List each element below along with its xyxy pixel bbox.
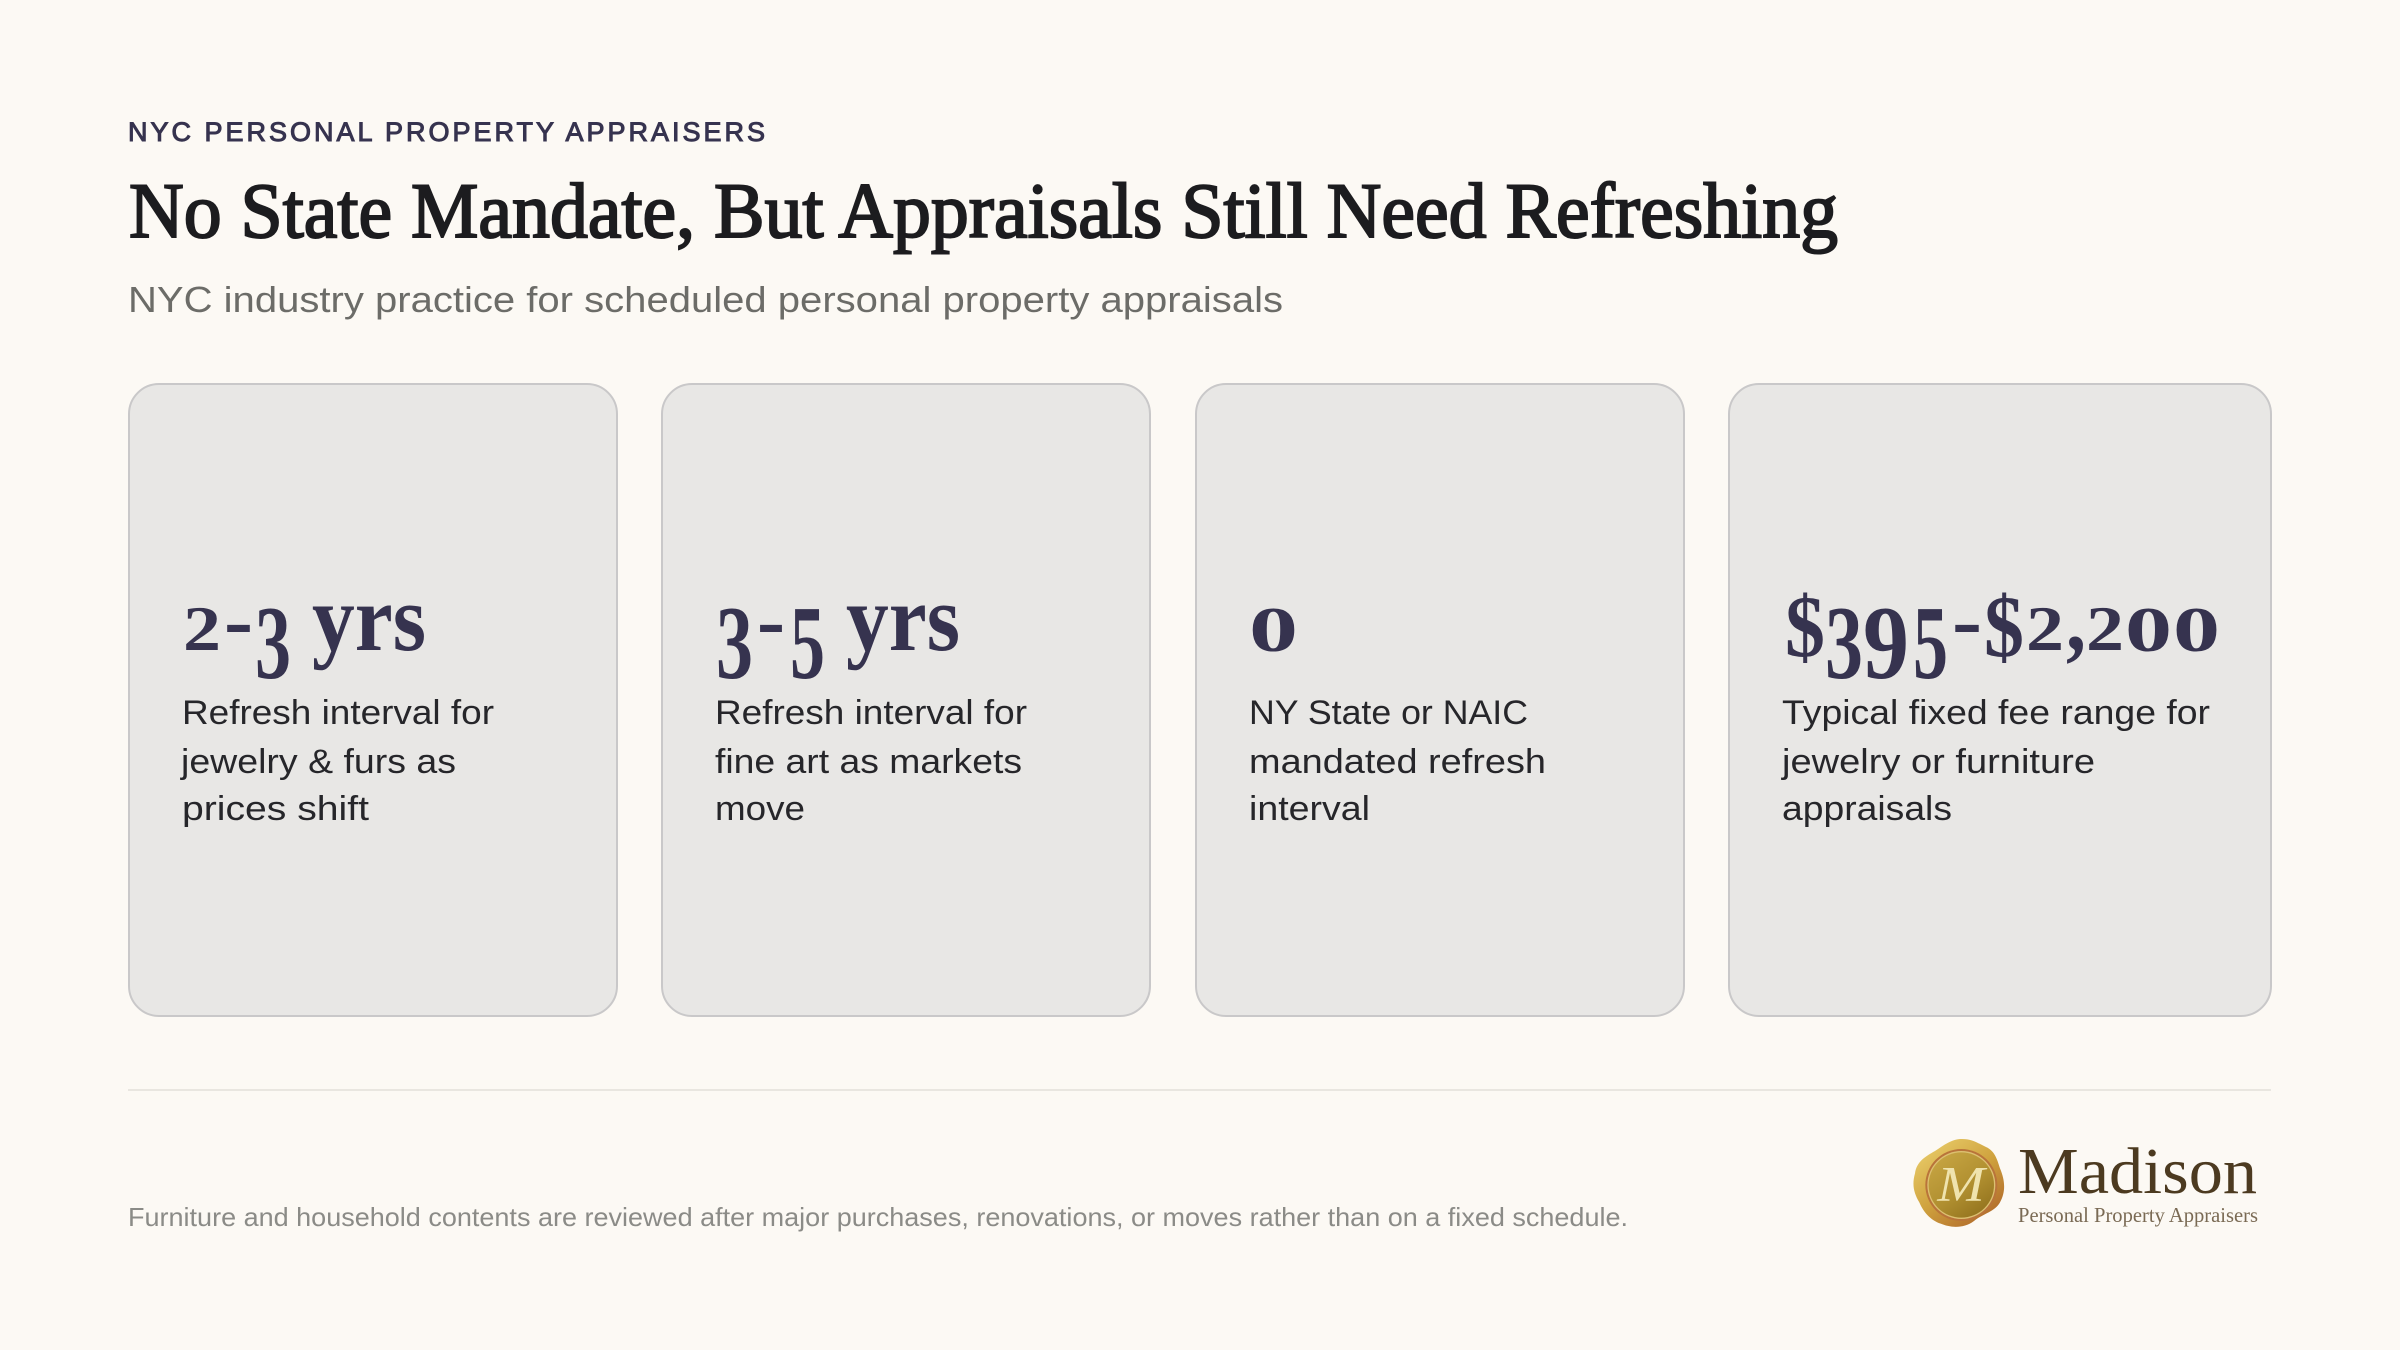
title: No State Mandate, But Appraisals Still Need Refreshing	[129, 167, 1838, 254]
stat: $395-$2,200: $	[1785, 579, 1825, 676]
description: move	[715, 790, 805, 828]
icon: gold wax seal	[1913, 1139, 2004, 1227]
stat: 0: 0	[1249, 594, 1298, 665]
stat: 2-3 yrs: yrs	[312, 567, 426, 671]
seal monogram: M	[1936, 1155, 1987, 1211]
description: Refresh interval for	[715, 694, 1027, 732]
stat: 2-3 yrs: 3	[255, 584, 291, 701]
description: interval	[1249, 790, 1370, 828]
description: Typical fixed fee range for	[1782, 694, 2210, 732]
eyebrow label: NYC PERSONAL PROPERTY APPRAISERS	[128, 117, 765, 147]
stat: $395-$2,200: 9	[1863, 584, 1909, 701]
stat: $395-$2,200: 3	[1825, 584, 1863, 701]
footnote: Furniture and household contents are reviewed after major purchases, renovations, or moves rather than on a fixed schedule.	[128, 1202, 1628, 1232]
card background	[1729, 384, 2271, 1016]
stat: $395-$2,200: ,	[2066, 571, 2086, 670]
stat: 3-5 yrs: 5	[790, 584, 825, 701]
description: fine art as markets	[715, 743, 1022, 781]
stat: $395-$2,200: 0	[2125, 594, 2172, 665]
card background	[129, 384, 617, 1016]
description: prices shift	[182, 790, 370, 828]
tagline: Personal Property Appraisers	[2018, 1203, 2258, 1227]
stat: 3-5 yrs: 3	[716, 584, 753, 701]
stat: 2-3 yrs: -	[224, 574, 253, 667]
panel: fixed fee range	[1729, 384, 2271, 1016]
panel: mandated refresh interval	[1196, 384, 1684, 1016]
card background	[1196, 384, 1684, 1016]
stat: $395-$2,200: 2	[2086, 593, 2124, 664]
stat: $395-$2,200: 2	[2026, 593, 2064, 664]
card background	[662, 384, 1150, 1016]
wordmark: Madison	[2018, 1135, 2257, 1208]
description: jewelry or furniture	[1781, 743, 2095, 781]
description: mandated refresh	[1249, 743, 1546, 781]
description: jewelry & furs as	[180, 743, 456, 781]
stat: $395-$2,200: $	[1984, 579, 2024, 676]
stat: $395-$2,200: 5	[1913, 584, 1948, 701]
description: appraisals	[1782, 790, 1952, 828]
stat: 2-3 yrs: 2	[183, 593, 221, 664]
panel: fine art refresh interval	[662, 384, 1150, 1016]
subtitle: NYC industry practice for scheduled personal property appraisals	[128, 279, 1283, 320]
panel: jewelry and furs refresh interval	[129, 384, 617, 1016]
stat: 3-5 yrs: -	[757, 574, 785, 667]
stat: $395-$2,200: 0	[2173, 594, 2220, 665]
stat: 3-5 yrs: yrs	[846, 567, 960, 671]
logo: Madison Personal Property Appraisers	[1913, 1135, 2258, 1227]
description: NY State or NAIC	[1249, 694, 1528, 732]
description: Refresh interval for	[182, 694, 494, 732]
stat: $395-$2,200: -	[1952, 574, 1982, 667]
